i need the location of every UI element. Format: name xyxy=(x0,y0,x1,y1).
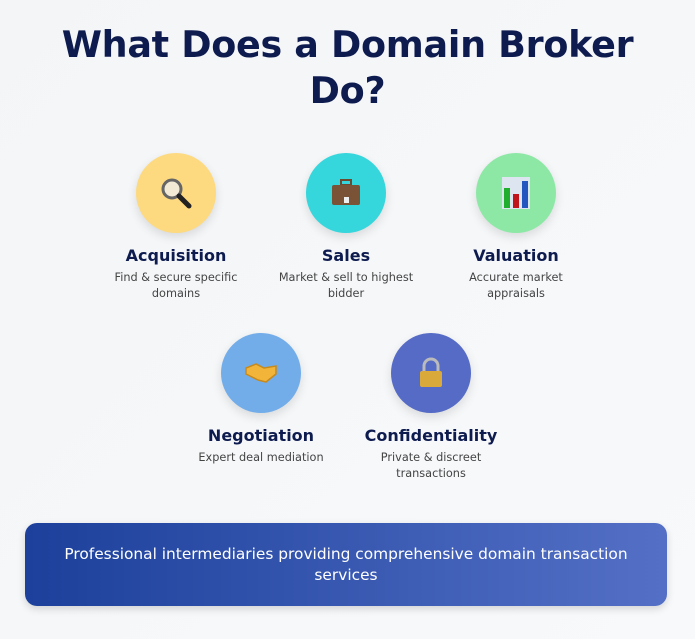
banner xyxy=(25,523,667,606)
label: Confidentiality xyxy=(365,426,497,445)
description: bidder xyxy=(328,287,364,300)
description xyxy=(279,271,413,300)
description: Market & sell to highest xyxy=(279,271,413,284)
item: valuation xyxy=(469,153,563,300)
banner: services xyxy=(314,566,378,584)
banner: Professional intermediaries providing comprehensive domain transaction xyxy=(64,544,628,562)
title: Do? xyxy=(310,69,385,112)
label: Valuation xyxy=(473,246,559,265)
description xyxy=(469,271,563,300)
description: appraisals xyxy=(487,287,545,300)
title: What Does a Domain Broker xyxy=(62,23,633,66)
description: Accurate market xyxy=(469,271,563,284)
description: Expert deal mediation xyxy=(198,451,324,464)
item: sales xyxy=(279,153,413,300)
item: negotiation xyxy=(198,333,324,464)
label: Acquisition xyxy=(126,246,226,265)
label: Sales xyxy=(322,246,370,265)
icon: handshake xyxy=(221,333,301,413)
item: confidentiality xyxy=(365,333,497,480)
icon: padlock xyxy=(391,333,471,413)
description xyxy=(115,271,237,300)
icon: briefcase xyxy=(306,153,386,233)
label: Negotiation xyxy=(208,426,314,445)
description: Find & secure specific xyxy=(115,271,237,284)
item: acquisition xyxy=(115,153,237,300)
icon: bar chart xyxy=(476,153,556,233)
description: transactions xyxy=(396,467,466,480)
description xyxy=(381,451,482,480)
icon: magnifier xyxy=(136,153,216,233)
description: Private & discreet xyxy=(381,451,481,464)
title xyxy=(62,23,634,112)
description: domains xyxy=(152,287,200,300)
